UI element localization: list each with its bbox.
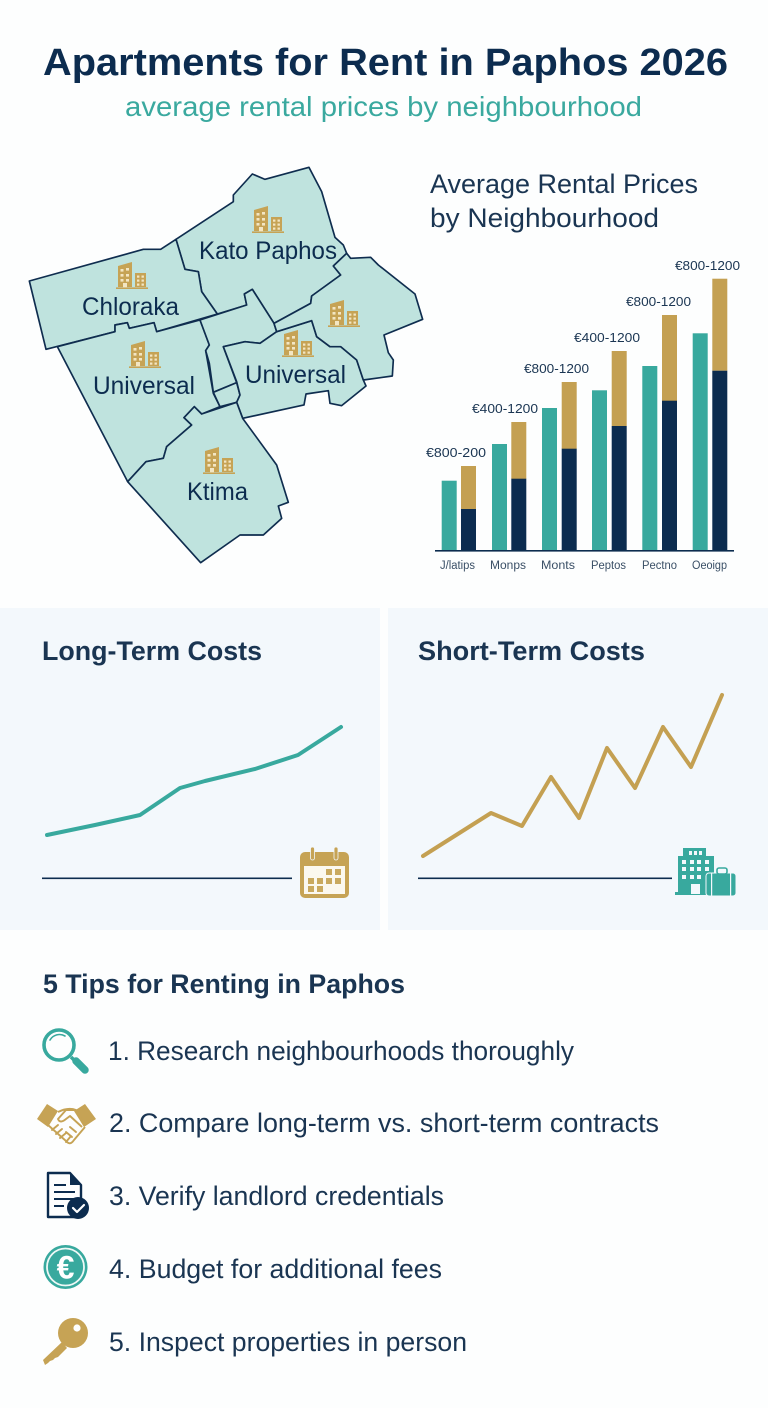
value labels: €400-1200: [574, 330, 640, 345]
category labels: Monts: [541, 560, 575, 572]
icon: building Kato Paphos: [252, 206, 284, 233]
icon: building Chloraka: [116, 262, 148, 289]
title: Apartments for Rent in Paphos 2026: [43, 42, 728, 84]
chart heading: by Neighbourhood: [430, 203, 659, 233]
region: central strip: [200, 289, 277, 392]
tip 3: [48, 1173, 444, 1219]
label: Universal west: Universal: [93, 372, 195, 400]
tip 1: [44, 1030, 574, 1070]
icon: building Ktima: [203, 447, 235, 474]
region: Universal east: [223, 321, 366, 418]
tips heading: 5 Tips for Renting in Paphos: [43, 969, 405, 999]
neighbourhood map: [29, 167, 423, 563]
value labels: €800-1200: [626, 294, 691, 309]
panel: long-term costs: [0, 608, 380, 930]
region: east: [274, 253, 423, 380]
icon: handshake: [37, 1104, 96, 1143]
chart heading: Average Rental Prices: [430, 169, 698, 199]
text: 2. Compare long-term vs. short-term contracts: [109, 1108, 659, 1138]
label: Chloraka: Chloraka: [82, 293, 179, 321]
panel: short-term costs: [388, 608, 768, 930]
region: Universal west: [57, 320, 220, 482]
icon: calendar: [300, 847, 349, 898]
text: 5. Inspect properties in person: [109, 1327, 467, 1357]
region: Ktima: [128, 402, 288, 563]
axis: [418, 878, 672, 879]
tips list: [37, 1030, 659, 1365]
heading: Long-Term Costs: [42, 636, 262, 666]
category labels: Monps: [490, 560, 526, 572]
value labels: €400-1200: [472, 401, 538, 416]
category labels: Peptos: [591, 560, 626, 572]
tip 5: [43, 1318, 467, 1365]
label: Universal east: Universal: [245, 361, 346, 389]
bars: teal: [442, 333, 708, 551]
axis: [435, 550, 734, 552]
text: 1. Research neighbourhoods thoroughly: [108, 1036, 574, 1066]
bars: navy: [461, 371, 727, 551]
region: Kato Paphos: [176, 167, 347, 323]
subtitle: average rental prices by neighbourhood: [125, 91, 642, 122]
region: Chloraka: [29, 239, 217, 349]
axis: [42, 878, 292, 879]
value labels: [426, 258, 740, 460]
line chart: [423, 695, 722, 856]
icon: building Universal east: [282, 330, 314, 357]
value labels: €800-1200: [524, 361, 589, 376]
tip 4: [44, 1245, 442, 1289]
bar chart: [426, 258, 740, 572]
text: 4. Budget for additional fees: [109, 1254, 442, 1284]
chart heading: [430, 169, 698, 233]
icon: hotel and suitcase: [675, 848, 736, 896]
value labels: €800-1200: [675, 258, 740, 273]
icon: building Universal west: [129, 341, 161, 368]
icon: euro coin: [44, 1245, 88, 1289]
icon: document with check: [48, 1173, 89, 1219]
line chart: [47, 727, 341, 835]
label: Kato Paphos: Kato Paphos: [199, 237, 337, 265]
icon: magnifier: [44, 1030, 85, 1070]
value labels: €800-200: [426, 445, 486, 460]
heading: Short-Term Costs: [418, 636, 645, 666]
bars: gold: [461, 279, 727, 509]
category labels: Pectno: [642, 560, 677, 572]
icon: euro coin: €: [57, 1250, 75, 1286]
tip 2: [37, 1104, 659, 1143]
text: 3. Verify landlord credentials: [109, 1181, 444, 1211]
category labels: Oeoigp: [692, 560, 727, 572]
region: central small: [213, 383, 240, 407]
category labels: J/latips: [440, 560, 475, 572]
icon: building east: [328, 300, 360, 327]
category labels: [440, 560, 727, 572]
label: Ktima: Ktima: [187, 478, 248, 506]
icon: key: [43, 1318, 88, 1365]
